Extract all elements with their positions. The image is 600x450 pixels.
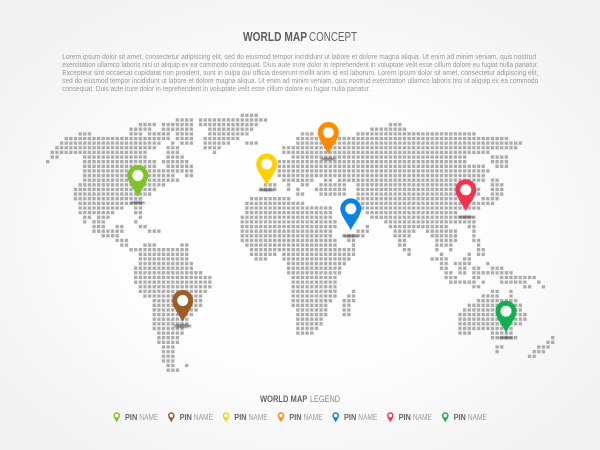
legend item: green: PIN: [454, 413, 466, 422]
legend item: light green: PIN: [125, 413, 137, 422]
pin: yellow (West Europe): [256, 154, 277, 191]
legend item: brown: NAME: [194, 413, 213, 422]
pin: red (East Asia): [455, 179, 476, 218]
legend item: blue: [332, 412, 377, 422]
legend item: yellow: [223, 412, 268, 422]
legend item: red: NAME: [413, 413, 432, 422]
body text block: [62, 52, 538, 93]
legend: [113, 412, 487, 422]
pin: green (Australia): [496, 301, 516, 339]
legend item: orange: [278, 412, 323, 422]
legend item: orange: NAME: [304, 413, 323, 422]
pin: orange (North Europe): [318, 122, 339, 160]
legend item: red: PIN: [399, 413, 411, 422]
legend item: orange: PIN: [289, 413, 302, 422]
legend item: blue: PIN: [344, 413, 356, 422]
legend item: yellow: NAME: [249, 413, 268, 422]
pin: brown (South America): [172, 290, 193, 328]
body text block: Lorem ipsum dolor sit amet, consectetur adipiscing elit, sed do eiusmod tempor incididunt ut labore et dolore magna aliqua. Ut enim ad minim veniam, quis nostrud: [62, 52, 536, 61]
legend item: brown: PIN: [180, 413, 192, 422]
title: CONCEPT: [309, 30, 357, 44]
dotted world map: [46, 115, 555, 370]
legend item: light green: [113, 412, 158, 422]
legend item: light green: NAME: [139, 413, 158, 422]
pin: blue (Middle East): [340, 198, 361, 237]
legend heading: WORLD MAP: [260, 394, 307, 404]
legend item: red: [387, 412, 432, 422]
body text block: Excepteur sint occaecat cupidatat non proident, sunt in culpa qui officia deserunt mollit anim id est laborum. Lorem ipsum dolor sit amet, consectetur adipiscing elit,: [62, 68, 538, 77]
legend item: brown: [168, 412, 213, 422]
legend item: yellow: PIN: [234, 413, 247, 422]
title: [243, 30, 357, 44]
title: WORLD MAP: [243, 30, 307, 44]
legend item: blue: NAME: [358, 413, 377, 422]
legend item: green: [442, 412, 487, 422]
pin: light green (North America): [127, 165, 148, 204]
legend heading: LEGEND: [310, 394, 340, 404]
body text block: consequat. Duis aute irure dolor in reprehenderit in voluptate velit esse cillum dolore eu fugiat nulla pariatur.: [62, 84, 370, 93]
legend item: green: NAME: [468, 413, 487, 422]
